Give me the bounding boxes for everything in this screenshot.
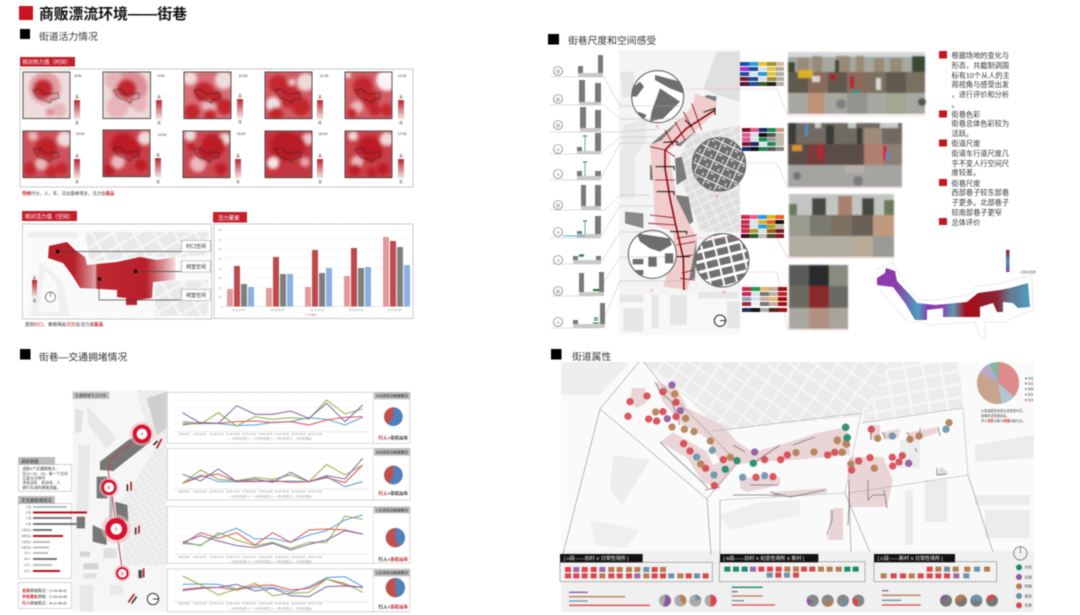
circle D detail bbox=[696, 234, 749, 287]
chart axis labels: 60 bbox=[219, 248, 222, 251]
chart B lines bbox=[183, 458, 363, 487]
panel: congestion ranking bars: B 路 bbox=[26, 510, 31, 514]
legend and compass bbox=[32, 275, 56, 303]
panel: survey basis: 群行车流的拥堵流量。 bbox=[22, 485, 60, 490]
panel: survey basis: 调研依据 bbox=[21, 458, 39, 465]
axis labels and legends: 8:00-9:00 9:00-10:00 10:00-11:00 11:00-12:00 12:00-13:00 13:00-14:00 14:00-15:00 15:00-16:00 16:00-17:00 bbox=[178, 432, 322, 436]
panel: congestion ranking bars: C行人 bbox=[24, 563, 31, 567]
street photos bbox=[788, 52, 926, 329]
panel: congestion ranking bars: A非机动 bbox=[21, 528, 31, 532]
callouts: 祠堂空间 bbox=[186, 264, 206, 270]
panel: street section diagrams: ☹ bbox=[556, 288, 561, 294]
panel: congestion line charts bbox=[167, 392, 410, 612]
pies B bbox=[807, 595, 864, 607]
segment C bbox=[874, 554, 998, 607]
panel: congestion ranking bars: B非机动 bbox=[21, 534, 31, 538]
heatmap 13:00 bbox=[23, 131, 73, 178]
time labels: 13:00 bbox=[76, 132, 84, 136]
panel: street section diagrams: ☹ bbox=[556, 122, 561, 128]
chart D lines bbox=[183, 576, 363, 597]
circle B detail bbox=[692, 138, 746, 191]
chart A lines bbox=[183, 400, 363, 426]
pie captions bbox=[379, 434, 409, 610]
text block: street analysis: 西部巷子较东部巷 bbox=[952, 188, 1009, 197]
panel: congestion summary: 手机堵车拥堵：C>D>A>B bbox=[22, 594, 67, 599]
pie captions: 行人>非机动车 bbox=[379, 434, 409, 441]
panel: street section diagrams: ☺ bbox=[556, 147, 560, 152]
heatmap 11:00 bbox=[265, 72, 315, 121]
time labels bbox=[74, 74, 406, 137]
section letters: D bbox=[723, 290, 726, 295]
base map bbox=[561, 362, 1034, 612]
pie B bbox=[384, 466, 403, 484]
colour palettes bbox=[740, 62, 787, 312]
pies A bbox=[659, 595, 717, 607]
panel: congestion summary bbox=[18, 582, 72, 608]
panel: street section diagrams: ☹ bbox=[556, 96, 561, 102]
heatmap 9:00 bbox=[103, 70, 150, 119]
heading: traffic congestion: 街巷—交通拥堵情况 bbox=[39, 350, 127, 364]
chart axis labels: D1 D2 D3 D4 bbox=[349, 309, 364, 312]
legend: categories: 购物 bbox=[1025, 584, 1032, 589]
street buildings bbox=[77, 431, 151, 578]
heading: traffic congestion bbox=[20, 349, 127, 364]
heatmap 8:00 bbox=[23, 72, 70, 119]
text block: street analysis: 街巷尺度 bbox=[952, 179, 980, 188]
pie legend: 服务 bbox=[1028, 392, 1034, 396]
text block: street analysis: 乎不变人行空间尺 bbox=[952, 159, 1009, 168]
text block: street analysis: 观视角与感受出发 bbox=[952, 80, 1009, 89]
text block: street analysis: 活跃。 bbox=[952, 129, 973, 138]
segment B bbox=[719, 554, 865, 607]
axis labels and legends: — 12月29日(周一) — 12月30日(周二) — 1月1日(周三) — 1月2日(周四) bbox=[228, 494, 312, 498]
title: 商贩漂流环境——街巷 bbox=[39, 5, 187, 23]
pie legend: 住宿 bbox=[1028, 382, 1034, 386]
section letters: C bbox=[651, 287, 654, 292]
chart axis labels: 40 bbox=[219, 268, 222, 271]
panel: survey basis bbox=[18, 457, 72, 492]
panel: street section diagrams bbox=[550, 55, 690, 328]
photo strip A bbox=[788, 52, 926, 114]
chart axis labels: A1 A2 A3 A4 bbox=[232, 309, 246, 312]
section letters bbox=[651, 124, 726, 295]
heatmap 10:00 bbox=[183, 71, 233, 121]
node C: C bbox=[115, 527, 118, 532]
chart axis labels: C1 C2 C3 C4 bbox=[310, 309, 325, 312]
pie legend: 村宅 bbox=[1028, 376, 1034, 380]
colour legends: 高 bbox=[157, 94, 161, 99]
legend and compass: 低 bbox=[33, 298, 37, 303]
colour legends: 低 bbox=[236, 179, 240, 184]
label: heat by time: 相对热力值（时间） bbox=[22, 58, 71, 66]
panel: survey basis: 在10~20、00。每一个点对 bbox=[22, 471, 68, 476]
colour legends: 低 bbox=[399, 179, 403, 184]
panel: street section diagrams: ☺ bbox=[556, 172, 560, 177]
text block: street analysis: 街巷总体色彩较为 bbox=[952, 119, 1009, 128]
heatmap 17:00 bbox=[345, 131, 394, 178]
circle A detail bbox=[632, 71, 684, 123]
colour legends: 高 bbox=[318, 153, 322, 158]
heading: street vitality: 街道活力情况 bbox=[39, 30, 98, 43]
chart axis labels: 50 bbox=[219, 258, 222, 261]
callouts: 祠堂空间 bbox=[186, 292, 206, 299]
pies C bbox=[940, 595, 998, 607]
photo strip B bbox=[788, 123, 902, 187]
note: spatial: 西侧村口、串联两处祠堂处活力值最高 bbox=[25, 321, 104, 328]
panel: congestion ranking bars: A 路 bbox=[26, 505, 31, 509]
segment A bbox=[560, 554, 717, 607]
chart axis labels: B1 B2 B3 B4 bbox=[271, 309, 285, 312]
panel: street attributes map bbox=[561, 362, 1034, 612]
panel: congestion summary: 行人拥堵情况：A>C>B>D bbox=[22, 600, 67, 606]
legend: categories: 饮食 bbox=[1025, 603, 1032, 608]
leader lines bbox=[550, 77, 690, 328]
text block: street analysis: 总体评价 bbox=[952, 218, 980, 227]
label: vitality factors bbox=[213, 212, 247, 222]
palette A bbox=[740, 62, 784, 86]
label: node distribution bbox=[73, 392, 109, 399]
colour legends: 高 bbox=[236, 153, 240, 158]
colour legends: 高 bbox=[318, 94, 322, 99]
axis labels and legends: — 12月29日(周一) — 12月30日(周二) — 1月1日(周三) — 1月2日(周四) bbox=[228, 606, 312, 610]
panel: survey basis: 选取4个交通拥堵点， bbox=[22, 466, 59, 471]
chart axis labels: E1 E2 E3 E4 bbox=[388, 309, 402, 312]
colour legends: 低 bbox=[75, 179, 79, 184]
chart axis labels: 80 bbox=[219, 229, 222, 232]
heatmap 15:00 bbox=[183, 129, 231, 178]
compass bbox=[714, 315, 726, 326]
time labels: 10:00 bbox=[238, 74, 248, 78]
heading: street attributes bbox=[551, 349, 611, 363]
bars bbox=[227, 237, 410, 306]
time labels: 9:00 bbox=[158, 74, 164, 78]
bars bbox=[33, 507, 87, 571]
pie captions: 行人<非机动车 bbox=[379, 603, 409, 610]
note: attributes: 街巷的活跃度较高， bbox=[981, 413, 1010, 418]
palette D bbox=[742, 287, 787, 312]
chart axis labels: 人 车 摊 店 bbox=[305, 312, 317, 316]
colour legends: 低 bbox=[75, 120, 79, 125]
chart axis labels bbox=[219, 229, 402, 316]
panel: congestion ranking bars: D行人 bbox=[24, 569, 31, 573]
time labels: 8:00 bbox=[74, 74, 82, 78]
text block: street analysis bbox=[939, 51, 1010, 227]
text block: street analysis: 根据场地的变化与 bbox=[952, 51, 1009, 60]
base map bbox=[73, 390, 167, 612]
text block: street analysis: 街巷色彩 bbox=[952, 110, 980, 119]
legend and compass: 高 bbox=[33, 275, 37, 280]
text block: street analysis: 标有10个从人的主 bbox=[952, 71, 1010, 80]
time labels: 16:00 bbox=[318, 132, 328, 136]
callouts: 村口空间 bbox=[186, 243, 206, 250]
text block: street analysis: 子更多。北部巷子 bbox=[952, 198, 1009, 207]
panel: vitality factors bar chart bbox=[213, 212, 413, 318]
colour legends: 低 bbox=[238, 119, 242, 124]
text block: street analysis: ，进行评价和分析 bbox=[952, 90, 1009, 99]
index legend: 口袋街道指数 bbox=[1020, 270, 1036, 274]
chart axis labels: 10 bbox=[219, 296, 222, 299]
pie captions: 行人<非机动车 bbox=[379, 556, 409, 563]
panel: street section diagrams: ☺ bbox=[556, 320, 560, 325]
side panel headers: A点非机动拥堵情况 bbox=[376, 393, 408, 398]
index legend bbox=[1006, 250, 1036, 274]
node C bbox=[102, 514, 131, 544]
attribute dots bbox=[624, 381, 953, 489]
note: attributes: 并以零售功能与商铺功能为主。 bbox=[981, 418, 1026, 423]
time labels: 11:00 bbox=[320, 74, 328, 78]
heading: street scale: 街巷尺度和空间感受 bbox=[568, 34, 656, 47]
panel: congestion map bbox=[73, 390, 167, 612]
chart: attributes pie bbox=[977, 362, 1034, 404]
time labels: 17:00 bbox=[398, 132, 406, 136]
heatmap 12:00 bbox=[345, 69, 398, 119]
heading: street vitality bbox=[20, 29, 98, 43]
panel: congestion ranking bars: C 路 bbox=[26, 516, 31, 520]
pie A bbox=[384, 407, 403, 426]
axis labels and legends: 8:00-9:00 9:00-10:00 10:00-11:00 11:00-12:00 12:00-13:00 13:00-14:00 14:00-15:00 15:00-16:00 16:00-17:00 bbox=[178, 602, 322, 606]
label: vitality factors: 活力要素 bbox=[218, 214, 240, 222]
time labels: 12:00 bbox=[398, 74, 406, 78]
colour legends: 高 bbox=[399, 153, 403, 158]
chart frames bbox=[167, 392, 410, 612]
chart axis labels: 20 bbox=[219, 287, 222, 290]
text block: street analysis: 度较差。 bbox=[952, 168, 980, 177]
node A: A bbox=[141, 432, 144, 437]
label: node distribution: 交通拥堵节点分布 bbox=[75, 392, 107, 398]
colour legends: 低 bbox=[399, 120, 403, 125]
section letters: A bbox=[656, 124, 659, 129]
panel: congestion ranking bars: B行人 bbox=[24, 557, 31, 561]
greenery and canal bbox=[579, 136, 599, 323]
base map bbox=[619, 50, 740, 335]
colour legends: 高 bbox=[75, 153, 79, 158]
node D: D bbox=[121, 571, 124, 576]
photo strip C bbox=[789, 194, 894, 257]
circle C detail bbox=[628, 230, 676, 278]
label A: [ A段——旧村 X 日常性场所 ] bbox=[564, 555, 629, 562]
panel: street section diagrams: ☹ bbox=[556, 68, 561, 74]
text block: street analysis: 街道车行道尺度几 bbox=[952, 149, 1009, 158]
colour legends: 高 bbox=[399, 94, 403, 99]
pie legend bbox=[1025, 376, 1034, 402]
photo strip D bbox=[789, 265, 848, 329]
side panel headers bbox=[374, 392, 410, 576]
chart axis labels: 70 bbox=[219, 239, 222, 242]
node B: B bbox=[108, 485, 111, 490]
panel: congestion ranking bars: D非机动 bbox=[21, 546, 31, 550]
label B: [ B段——旧村 X 纪念性场所 X 新村 ] bbox=[723, 555, 805, 562]
map: vitality street bbox=[48, 242, 176, 305]
heading: street scale bbox=[548, 34, 656, 47]
axis labels and legends bbox=[178, 432, 322, 610]
chart: street index strip bbox=[875, 250, 1036, 338]
colour legends: 低 bbox=[156, 179, 160, 184]
heading: street attributes: 街道属性 bbox=[572, 350, 611, 363]
panel: segment summaries bbox=[560, 547, 1032, 608]
text block: street analysis: 街道尺度 bbox=[952, 139, 980, 148]
panel: street scale map bbox=[619, 50, 749, 335]
chart axis labels: 30 bbox=[219, 277, 222, 280]
colour legends: 低 bbox=[157, 120, 161, 125]
panel: congestion ranking bars bbox=[18, 496, 87, 578]
colour legends bbox=[74, 93, 404, 184]
label A bbox=[560, 554, 643, 562]
street axis and cross sections bbox=[648, 103, 715, 290]
panel: congestion summary: 总体拥堵情况：C>A>B>D bbox=[22, 588, 67, 593]
building edges bbox=[655, 382, 947, 535]
pink street bbox=[650, 93, 717, 290]
colour legends: 低 bbox=[318, 120, 322, 125]
time labels: 15:00 bbox=[236, 132, 246, 136]
axis labels and legends: — 12月29日(周一) — 12月30日(周二) — 1月1日(周三) — 1月2日(周四) bbox=[228, 437, 312, 441]
pie captions: 行人>非机动车 bbox=[379, 490, 409, 497]
section buildings bbox=[573, 55, 605, 324]
perception faces bbox=[554, 66, 562, 326]
pie legend: 购物 bbox=[1028, 387, 1034, 391]
palette B bbox=[742, 128, 784, 151]
palette C bbox=[741, 215, 784, 238]
colour legends: 高 bbox=[238, 93, 242, 98]
panel: congestion ranking bars: 交叉路拥堵情况 bbox=[21, 497, 52, 504]
label: heat by time bbox=[20, 57, 75, 66]
axis labels and legends: 8:00-9:00 9:00-10:00 10:00-11:00 11:00-12:00 12:00-13:00 13:00-14:00 14:00-15:00 15:00-16:00 16:00-17:00 bbox=[178, 555, 322, 559]
panel: survey basis: 非机动车、机动车、人 bbox=[22, 480, 61, 485]
panel: relative heat by time bbox=[20, 57, 413, 187]
segment outlines bbox=[563, 362, 993, 554]
pie D bbox=[386, 578, 405, 597]
panel: street section diagrams: ☺ bbox=[556, 258, 560, 263]
label B bbox=[720, 554, 818, 562]
label: spatial vitality: 相对活力值（空间） bbox=[25, 212, 74, 220]
text block: street analysis: 形态，共截制调国 bbox=[952, 61, 1009, 70]
panel: congestion ranking bars: A行人 bbox=[24, 551, 31, 555]
colour legends: 高 bbox=[75, 94, 79, 99]
legend: categories: 住宿 bbox=[1025, 574, 1032, 579]
building footprints bbox=[630, 382, 948, 540]
heatmap 14:00 bbox=[103, 130, 152, 177]
pie C bbox=[386, 528, 405, 547]
compass bbox=[147, 593, 159, 605]
colour legends: 低 bbox=[318, 179, 322, 184]
link lines to photos bbox=[683, 89, 925, 330]
axis labels and legends: — 12月29日(周一) — 12月30日(周二) — 1月1日(周三) — 1月2日(周四) bbox=[228, 560, 312, 564]
note: attributes: 从街道属性来看业态类型丰富， bbox=[981, 408, 1026, 413]
flow arrows bbox=[127, 439, 162, 603]
legend: categories: 服务 bbox=[1025, 593, 1032, 598]
text block: street analysis: 较南部巷子更窄 bbox=[952, 208, 1002, 217]
node B bbox=[99, 477, 119, 497]
callouts bbox=[56, 240, 210, 300]
heatmap 16:00 bbox=[265, 131, 314, 178]
pie legend: 饮食 bbox=[1028, 398, 1034, 402]
panel: congestion ranking bars: D 路 bbox=[26, 522, 31, 526]
panel: survey basis: 记录五分钟中 bbox=[22, 476, 45, 480]
section letters: B bbox=[716, 194, 719, 199]
note: heat: 傍晚时分，人、车、活动量峰增多，活力值最高 bbox=[22, 190, 115, 197]
side panel headers: D点非机动拥堵情况 bbox=[376, 570, 408, 575]
street buildings bbox=[650, 95, 717, 280]
axis labels and legends: 8:00-9:00 9:00-10:00 10:00-11:00 11:00-12:00 12:00-13:00 13:00-14:00 14:00-15:00 15:00-16:00 16:00-17:00 bbox=[178, 490, 322, 494]
panel: spatial vitality bbox=[22, 211, 212, 328]
node A bbox=[130, 422, 154, 446]
ground planes bbox=[573, 73, 605, 328]
panel: street section diagrams: ☺ bbox=[556, 230, 560, 235]
label: spatial vitality bbox=[22, 211, 77, 221]
legend: categories bbox=[1014, 547, 1032, 608]
panel: street section diagrams: ☹ bbox=[556, 202, 561, 208]
legend: categories: 村宅 bbox=[1025, 565, 1032, 570]
text block: street analysis: 。 bbox=[952, 100, 959, 109]
side panel headers: B点非机动拥堵情况 bbox=[376, 449, 408, 454]
colour legends: 高 bbox=[156, 152, 160, 157]
node D bbox=[114, 565, 131, 582]
chart C lines bbox=[183, 515, 363, 550]
note: attributes bbox=[981, 408, 1026, 423]
side panel headers: C点非机动拥堵情况 bbox=[376, 507, 408, 512]
time labels: 14:00 bbox=[158, 133, 166, 137]
label C: [ C段——新村 X 日常性场所 ] bbox=[878, 555, 943, 562]
gridlines bbox=[173, 395, 368, 597]
panel: congestion ranking bars: C非机动 bbox=[21, 540, 31, 544]
chart axis labels: 0 bbox=[221, 306, 223, 309]
